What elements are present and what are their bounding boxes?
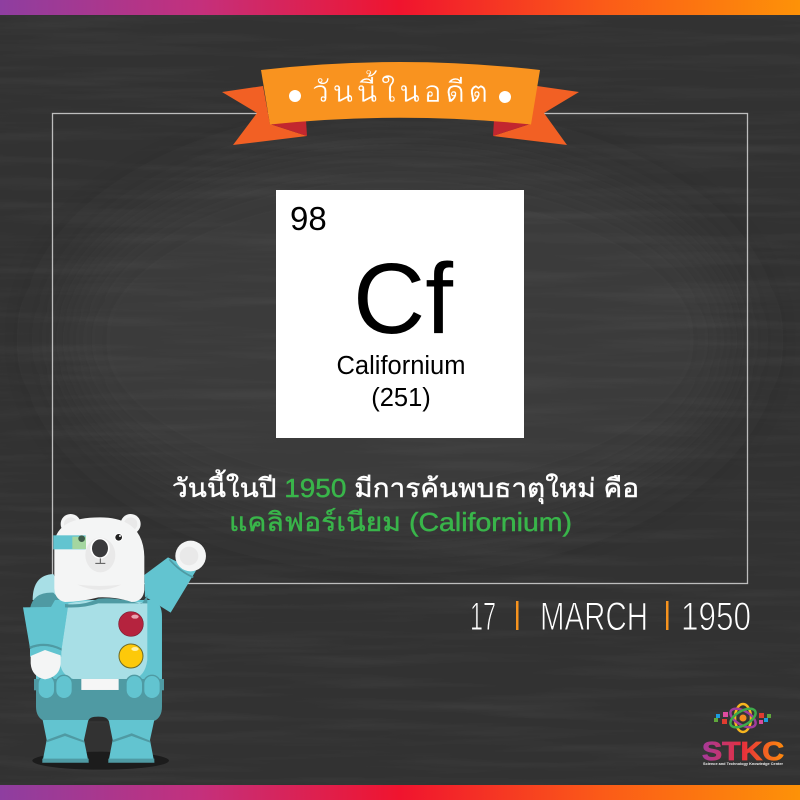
raised arm	[144, 557, 196, 613]
bottom gradient bar	[0, 785, 800, 800]
muzzle	[85, 538, 115, 572]
atom icon	[727, 704, 759, 732]
head	[53, 514, 147, 607]
STKC wordmark: STKC	[702, 736, 784, 766]
description line 2: แคลิฟอร์เนียม (Californium)	[229, 507, 572, 537]
atomic number: 98	[290, 200, 327, 237]
face	[54, 517, 144, 602]
white frame	[52, 114, 748, 584]
ribbon body	[261, 62, 540, 124]
belt buckle	[81, 679, 119, 690]
raised paw	[175, 541, 206, 571]
shadow	[32, 752, 169, 770]
description line 1: วันนี้ในปี 1950 มีการค้นพบธาตุใหม่ คือ	[172, 469, 639, 504]
belt and pants	[36, 690, 162, 721]
ribbon title: วันนี้ในอดีต	[312, 70, 488, 109]
date separator	[516, 601, 518, 630]
shoulder	[33, 574, 67, 600]
STKC logo	[702, 704, 784, 766]
top gradient bar	[0, 0, 800, 15]
description text	[172, 469, 639, 537]
date year: 1950	[681, 595, 751, 639]
red button	[119, 612, 143, 636]
element card	[276, 190, 524, 438]
ribbon bullets	[289, 90, 301, 102]
belt pouches	[38, 675, 160, 699]
ribbon folds	[270, 120, 530, 136]
ribbon banner	[222, 62, 579, 145]
date separator	[666, 601, 668, 630]
element symbol: Cf	[353, 243, 453, 355]
collar shadow	[65, 595, 147, 607]
nose	[90, 538, 110, 559]
leg gap	[88, 717, 108, 721]
date day: 17	[470, 595, 496, 639]
left paw	[31, 650, 61, 679]
ears	[61, 514, 81, 534]
logo caption: Science and Technology Knowledge Center	[703, 761, 783, 766]
element name: Californium	[337, 352, 465, 380]
smart glass	[53, 535, 86, 549]
torso	[36, 600, 162, 720]
legs	[42, 720, 89, 763]
yellow button	[119, 644, 143, 668]
right eye	[114, 533, 123, 542]
left arm	[23, 607, 68, 648]
ribbon left tail	[222, 86, 307, 145]
polar bear mascot	[23, 514, 206, 770]
particle dots	[714, 712, 771, 724]
date month: MARCH	[540, 595, 648, 639]
ribbon right tail	[493, 86, 579, 145]
date line	[470, 595, 751, 639]
atomic mass: (251)	[371, 384, 431, 412]
chin	[77, 585, 121, 590]
